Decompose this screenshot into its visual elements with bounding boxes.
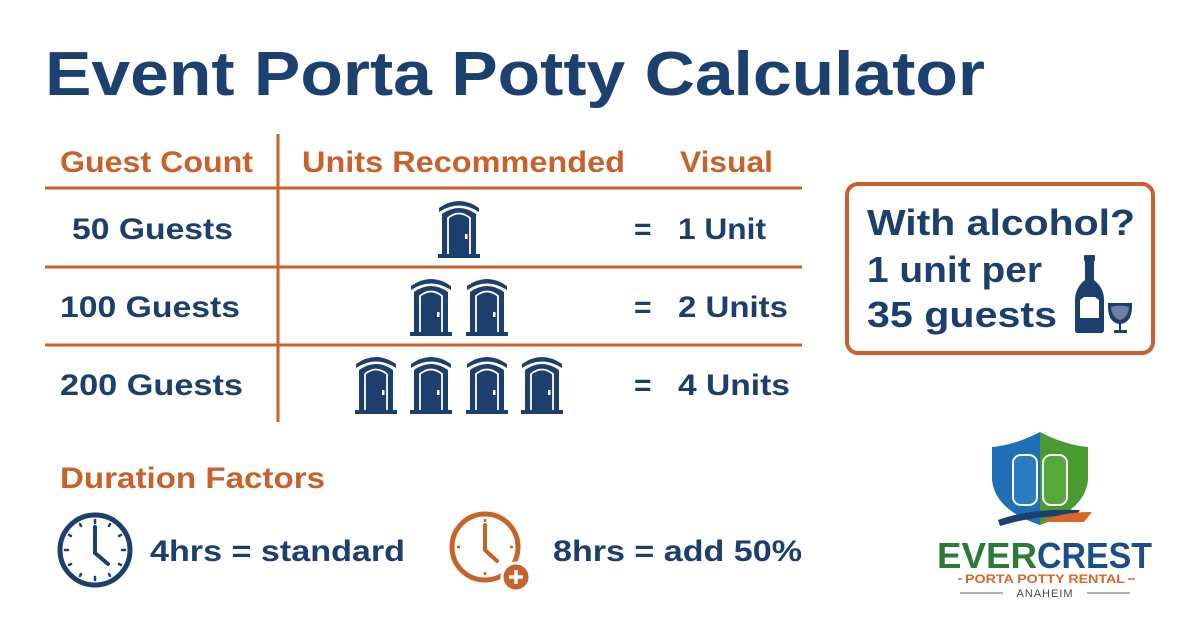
callout: alcohol: 1 unit per (867, 249, 1042, 290)
logo (937, 432, 1152, 600)
table header (60, 146, 773, 179)
row: 100 guests: 100 Guests (60, 291, 240, 324)
row: 200 guests: = (634, 369, 652, 402)
icon: clock standard (60, 515, 130, 585)
table header: Guest Count (60, 146, 253, 179)
row: 200 guests (60, 357, 790, 414)
text: 8hrs: 8hrs = add 50% (553, 535, 802, 568)
callout: alcohol: 35 guests (867, 294, 1057, 335)
callout: alcohol (847, 184, 1153, 353)
table header: Units Recommended (302, 146, 625, 179)
title: Event Porta Potty Calculator (45, 40, 985, 109)
table header: Visual (680, 146, 773, 179)
logo: ANAHEIM (1016, 588, 1074, 600)
row: 200 guests: 4 Units (678, 369, 790, 402)
icon: clock plus (452, 514, 530, 591)
row: 200 guests: 200 Guests (60, 369, 243, 402)
row: 50 guests: = (634, 213, 652, 246)
row: 50 guests: 1 Unit (678, 213, 766, 246)
logo: CREST (1037, 535, 1152, 576)
row: 50 guests (72, 201, 766, 258)
logo: EVER (937, 535, 1037, 576)
logo: PORTA POTTY RENTAL (965, 572, 1125, 586)
table (45, 134, 802, 422)
row: 50 guests: 50 Guests (72, 213, 233, 246)
row: 100 guests: = (634, 291, 652, 324)
text: 4hrs: 4hrs = standard (150, 535, 405, 568)
row: 100 guests (60, 279, 788, 336)
heading: duration factors: Duration Factors (60, 462, 325, 495)
callout: alcohol: With alcohol? (867, 202, 1135, 243)
icon: bottle and glass (1075, 255, 1132, 333)
row: 100 guests: 2 Units (678, 291, 788, 324)
